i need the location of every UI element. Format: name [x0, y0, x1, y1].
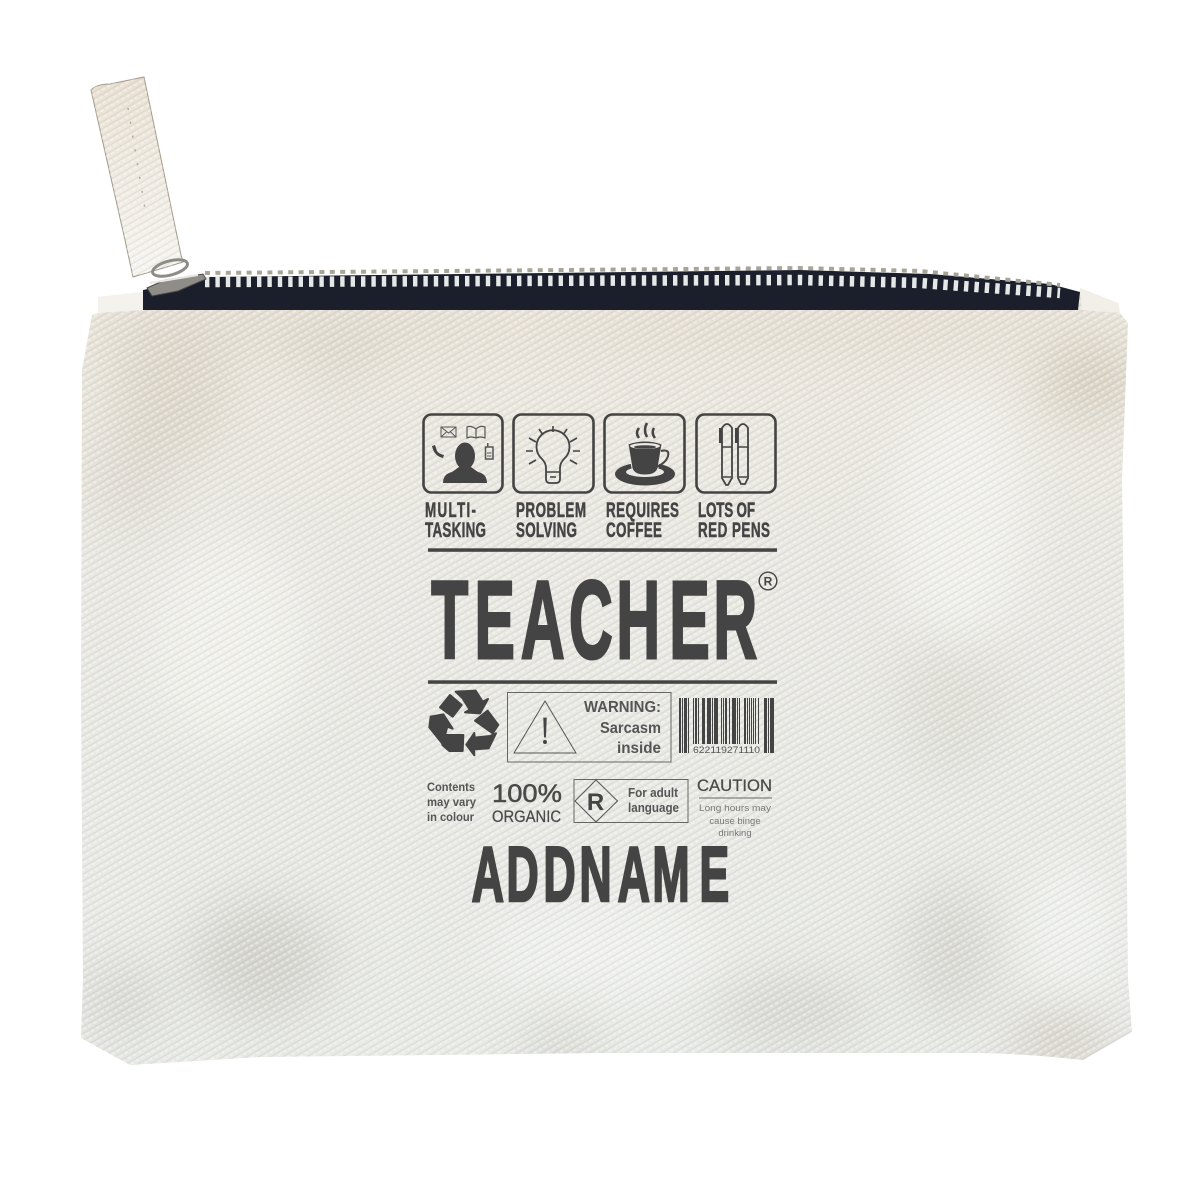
warning panel — [508, 692, 671, 762]
organic claim: ORGANIC — [492, 808, 561, 826]
name: ADDNAME — [472, 831, 729, 918]
contents note: Contents — [427, 782, 475, 794]
icon: coffee box — [604, 414, 684, 492]
icon captions: REQUIRES — [606, 498, 679, 522]
contents note — [427, 782, 477, 824]
caution note — [697, 776, 772, 839]
organic claim — [492, 780, 562, 826]
warning panel: WARNING: — [584, 699, 661, 716]
icon captions: COFFEE — [606, 518, 662, 542]
barcode: 622119271110 — [693, 745, 760, 755]
zipper — [143, 268, 1080, 310]
icon captions: MULTI- — [425, 498, 476, 522]
warning panel: Sarcasm — [600, 720, 661, 737]
rating panel: For adult — [628, 786, 679, 800]
icon captions: RED PENS — [698, 518, 770, 542]
zipper slider — [147, 257, 206, 296]
label artwork — [424, 414, 777, 918]
rating panel — [574, 780, 688, 822]
icon: multitasking box — [424, 414, 502, 492]
title: R — [764, 574, 773, 588]
icon: recycling symbol — [429, 691, 498, 755]
rating panel: R — [587, 789, 604, 816]
contents note: may vary — [427, 797, 477, 809]
caution note: drinking — [718, 828, 752, 839]
rating panel: language — [628, 801, 679, 815]
bag body — [60, 280, 1150, 1115]
icon: pens box — [696, 414, 776, 492]
icon captions: SOLVING — [516, 518, 577, 542]
icon captions: TASKING — [425, 518, 486, 542]
barcode — [679, 698, 774, 755]
icon captions: PROBLEM — [516, 498, 586, 522]
caution note: cause binge — [709, 816, 761, 827]
icon: light bulb box — [514, 414, 594, 492]
warning panel: inside — [617, 740, 661, 757]
bag tab — [91, 77, 183, 277]
contents note: in colour — [427, 812, 475, 824]
icon captions — [425, 498, 770, 542]
caution note: Long hours may — [699, 803, 771, 814]
icon captions: LOTS OF — [698, 498, 755, 522]
title: TEACHER — [431, 559, 757, 682]
organic claim: 100% — [492, 780, 562, 808]
caution note: CAUTION — [697, 776, 772, 795]
